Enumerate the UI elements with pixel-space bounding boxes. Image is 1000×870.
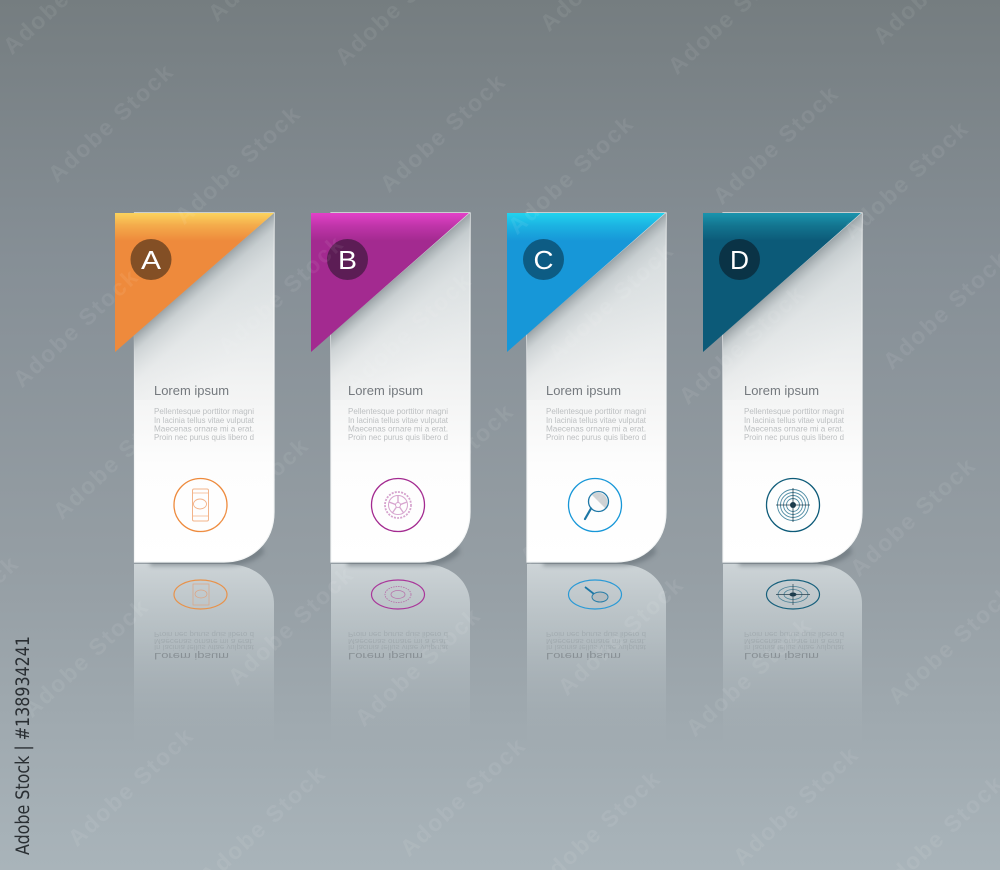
panel: card B xyxy=(311,213,470,566)
watermarks: Adobe Stock xyxy=(681,613,816,741)
card B drop shadow xyxy=(347,545,460,566)
watermarks: Adobe Stock xyxy=(515,441,650,569)
watermarks: Adobe Stock xyxy=(395,733,530,861)
card B body xyxy=(331,213,470,562)
card C text: Maecenas ornare mi a erat. xyxy=(546,424,646,434)
reflection: card C: In lacinia tellus vitae vulputat xyxy=(546,643,647,652)
card A heading: Lorem ipsum xyxy=(154,384,229,398)
icon: phone chat xyxy=(174,478,227,532)
badge B xyxy=(327,239,368,280)
watermarks: Adobe Stock xyxy=(553,572,688,700)
watermarks: Adobe Stock xyxy=(728,742,863,870)
panel: card C xyxy=(507,213,666,566)
badge A xyxy=(130,239,172,280)
card A text: Proin nec purus quis libero d xyxy=(154,433,254,442)
watermarks: Adobe Stock xyxy=(178,433,313,561)
reflection: card A xyxy=(134,564,274,750)
reflection: card C xyxy=(527,564,666,750)
card B text xyxy=(348,407,449,442)
watermarks: Adobe Stock xyxy=(48,396,183,524)
reflection: card C: Lorem ipsum xyxy=(546,651,621,660)
card D fold shadow xyxy=(723,213,862,400)
reflection: card D xyxy=(723,564,862,750)
card C text xyxy=(546,407,647,442)
watermarks: Adobe Stock xyxy=(375,69,510,197)
card D text: Proin nec purus quis libero d xyxy=(744,433,844,442)
card B fold shadow xyxy=(331,213,470,400)
card B text: Pellentesque porttitor magni xyxy=(348,407,448,416)
watermarks: Adobe Stock xyxy=(838,116,973,244)
card A corner flag xyxy=(115,213,274,352)
watermarks: Adobe Stock xyxy=(18,594,153,722)
watermarks: Adobe Stock xyxy=(213,231,348,359)
card B text: Maecenas ornare mi a erat. xyxy=(348,424,448,434)
card D text xyxy=(744,407,845,442)
card C corner flag xyxy=(507,213,665,352)
card A fold shadow xyxy=(134,213,274,400)
card B heading: Lorem ipsum xyxy=(348,384,423,398)
watermarks: Adobe Stock xyxy=(383,399,518,527)
card C drop shadow xyxy=(543,545,656,566)
watermarks: Adobe Stock xyxy=(845,453,980,581)
watermarks: Adobe Stock xyxy=(341,268,476,396)
card A body xyxy=(134,213,274,562)
reflection: card D: In lacinia tellus vitae vulputat xyxy=(744,643,845,652)
card B text: In lacinia tellus vitae vulputat xyxy=(348,416,449,425)
card D text: Maecenas ornare mi a erat. xyxy=(744,424,844,434)
icon: target xyxy=(766,478,820,532)
watermarks: Adobe Stock xyxy=(350,603,485,731)
card C fold shadow xyxy=(527,213,666,400)
panel: card D xyxy=(703,213,862,566)
badge C: C xyxy=(534,245,554,275)
reflection: card D: Proin nec purus quis libero d xyxy=(744,630,844,639)
reflection: card B: Proin nec purus quis libero d xyxy=(348,630,448,639)
card D drop shadow xyxy=(739,545,852,566)
badge A: A xyxy=(141,245,162,275)
badge C xyxy=(523,239,564,280)
reflection: card A: In lacinia tellus vitae vulputat xyxy=(154,643,255,652)
watermarks: Adobe Stock xyxy=(223,562,358,690)
reflection: card B xyxy=(331,564,470,750)
card A drop shadow xyxy=(150,545,264,566)
watermarks: Adobe Stock xyxy=(170,101,305,229)
watermarks: Adobe Stock xyxy=(63,723,198,851)
reflection: card D: Lorem ipsum xyxy=(744,651,819,660)
reflection: card C: Maecenas ornare mi a erat. xyxy=(546,637,646,646)
card B text: Proin nec purus quis libero d xyxy=(348,433,448,442)
watermarks: Adobe Stock xyxy=(8,264,143,392)
badge D: D xyxy=(730,245,749,275)
watermarks: Adobe Stock xyxy=(720,413,855,541)
watermarks: Adobe Stock xyxy=(708,81,843,209)
card D text: In lacinia tellus vitae vulputat xyxy=(744,416,845,425)
reflection: card C: Proin nec purus quis libero d xyxy=(546,630,646,639)
badge B: B xyxy=(338,245,357,275)
card B corner flag xyxy=(311,213,469,352)
reflection: card D: Maecenas ornare mi a erat. xyxy=(744,637,844,646)
reflection: card B: Lorem ipsum xyxy=(348,651,423,660)
card A text: Maecenas ornare mi a erat. xyxy=(154,424,254,434)
watermarks: Adobe Stock xyxy=(674,281,809,409)
icon: magnifier xyxy=(568,478,622,532)
watermarks: Adobe Stock xyxy=(43,59,178,187)
card D text: Pellentesque porttitor magni xyxy=(744,407,844,416)
card A text xyxy=(154,407,255,442)
card C text: Pellentesque porttitor magni xyxy=(546,407,646,416)
card C text: In lacinia tellus vitae vulputat xyxy=(546,416,647,425)
icon: gear xyxy=(372,478,424,532)
card C body xyxy=(527,213,666,562)
card A text: Pellentesque porttitor magni xyxy=(154,407,254,416)
watermarks: Adobe Stock xyxy=(503,111,638,239)
reflection: card B: Maecenas ornare mi a erat. xyxy=(348,637,448,646)
panel: card A xyxy=(115,213,274,566)
card C text: Proin nec purus quis libero d xyxy=(546,433,646,442)
reflection: card A: Lorem ipsum xyxy=(154,651,229,660)
card D corner flag xyxy=(703,213,861,352)
card A text: In lacinia tellus vitae vulputat xyxy=(154,416,255,425)
reflection: card A: Proin nec purus quis libero d xyxy=(154,630,254,639)
card D body xyxy=(723,213,862,562)
stock credit: Adobe Stock | #138934241 xyxy=(13,636,34,855)
reflection: card A: Maecenas ornare mi a erat. xyxy=(154,637,254,646)
card C heading: Lorem ipsum xyxy=(546,384,621,398)
watermarks: Adobe Stock xyxy=(543,238,678,366)
reflection: card B: In lacinia tellus vitae vulputat xyxy=(348,643,449,652)
card D heading: Lorem ipsum xyxy=(744,384,819,398)
badge D xyxy=(719,239,760,280)
